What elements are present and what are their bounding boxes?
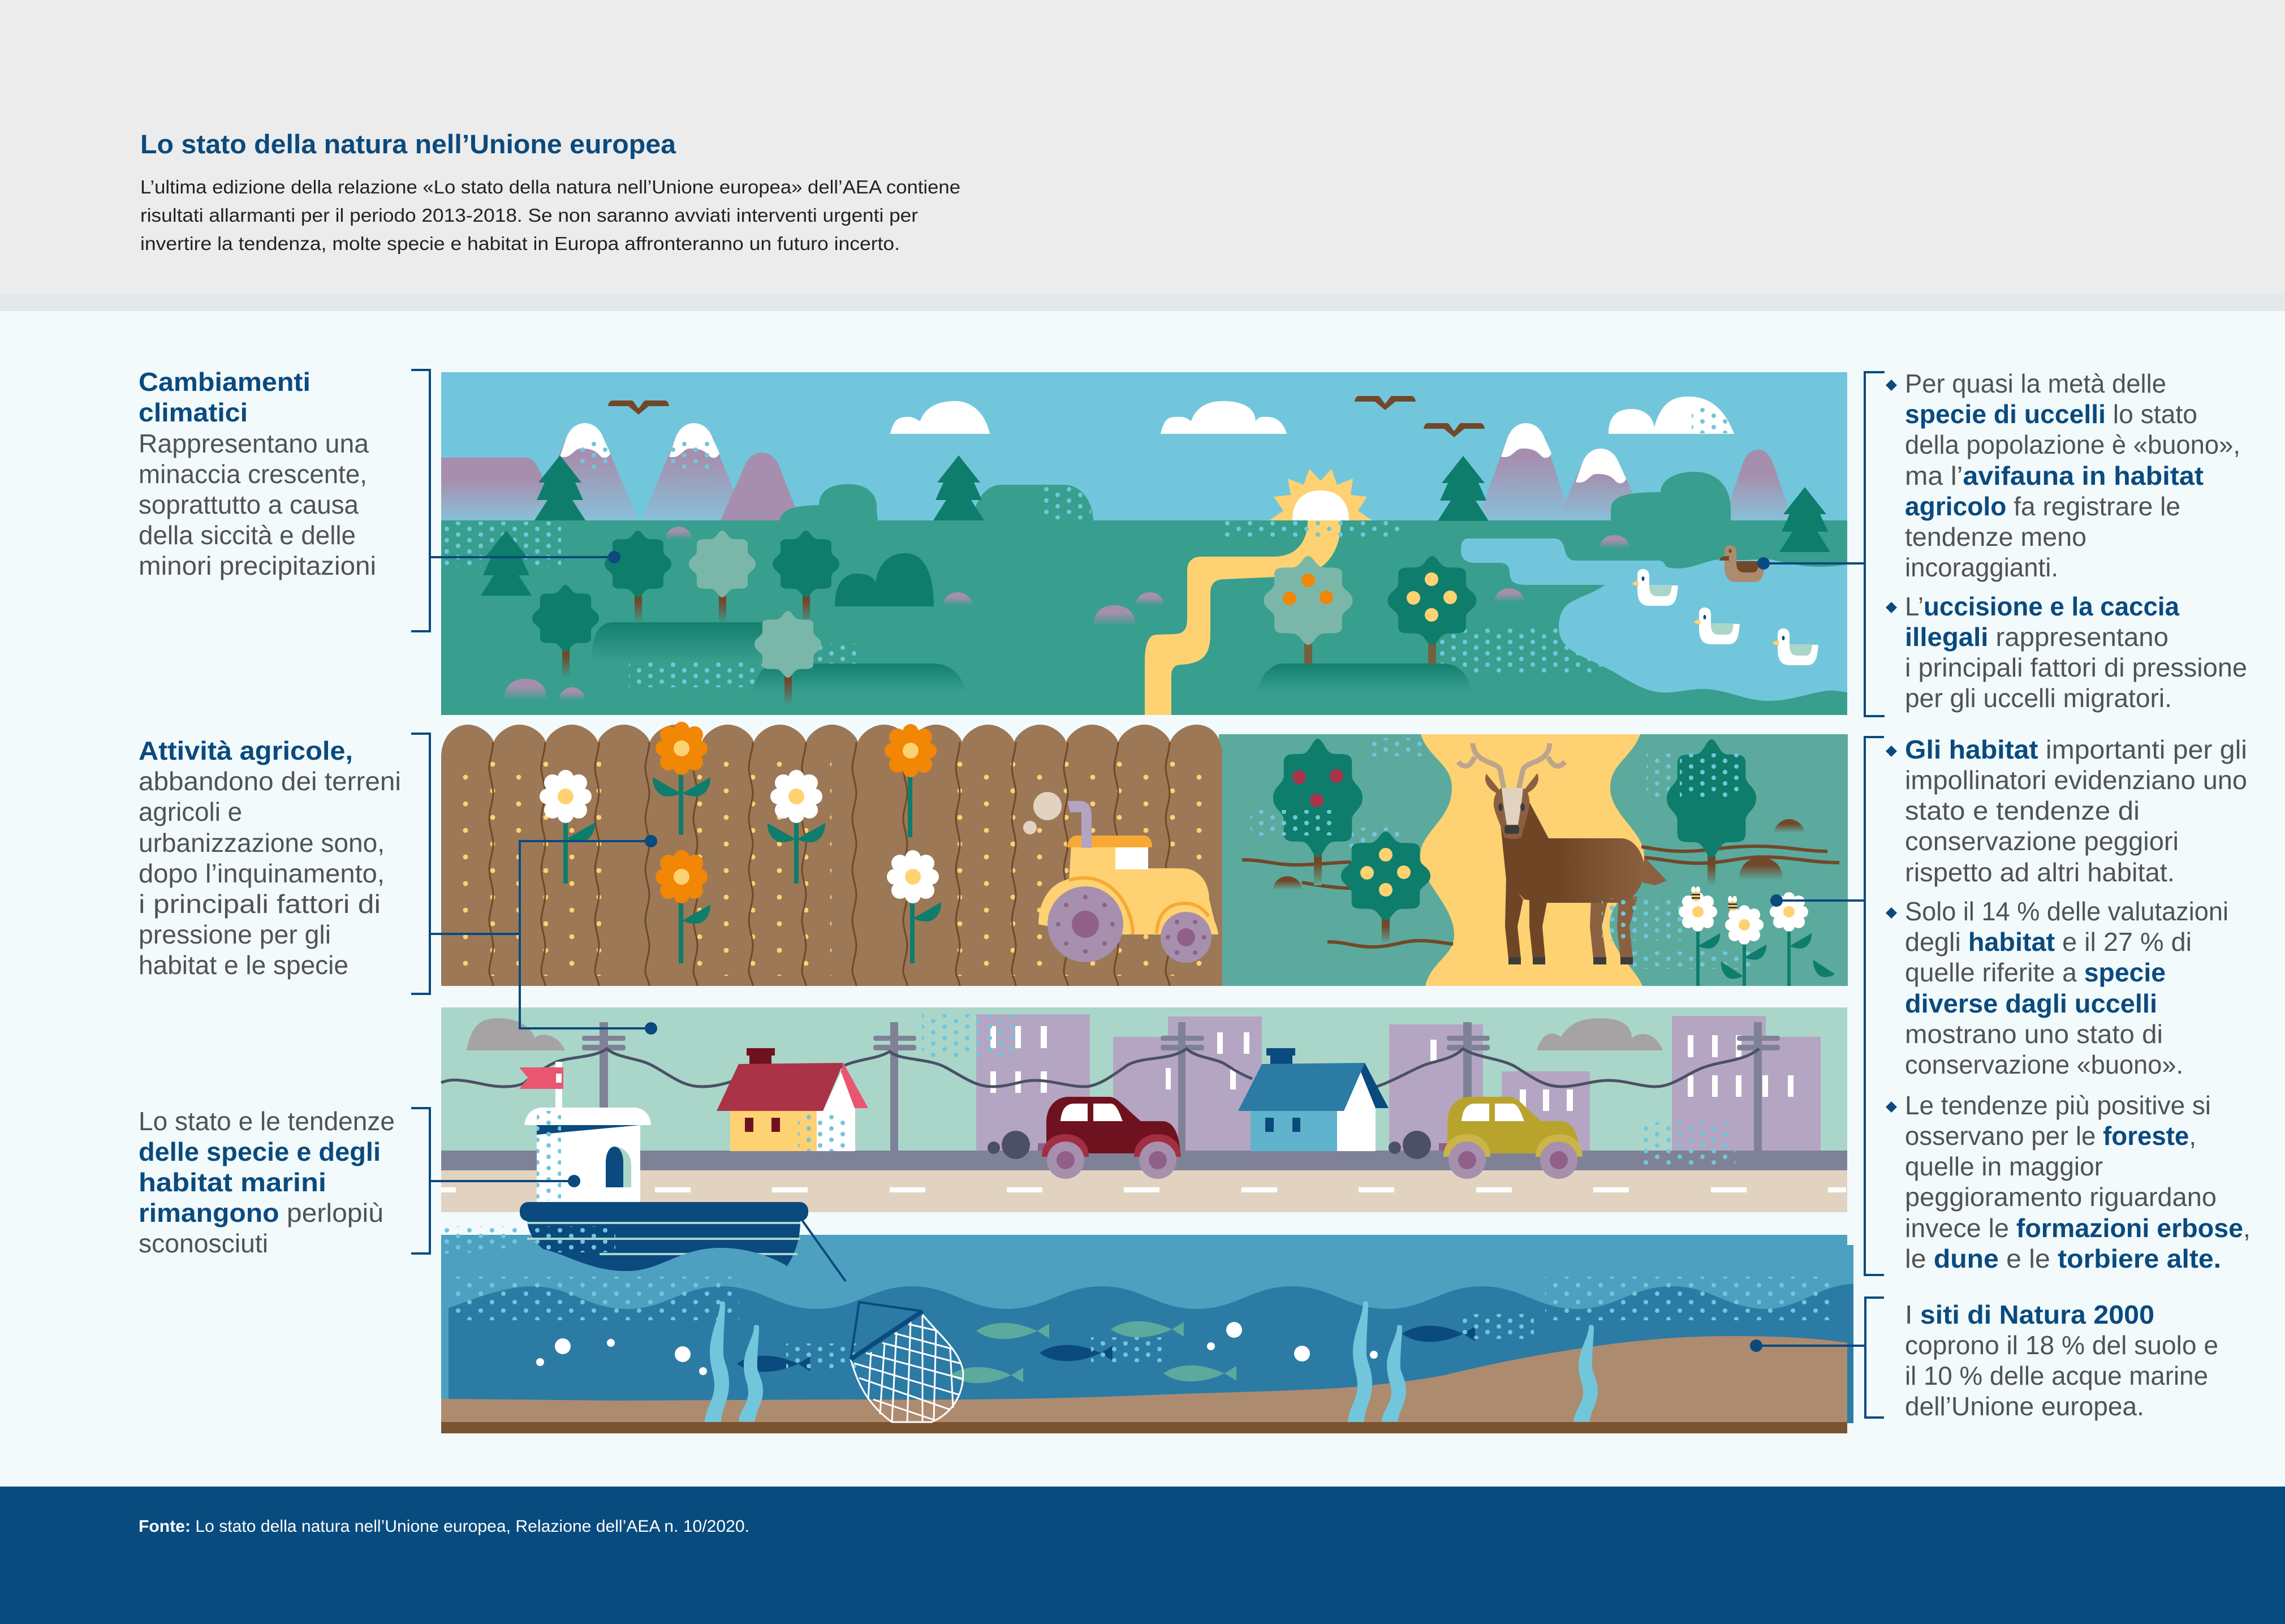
- text: birds: incoraggianti.: [1905, 553, 2058, 582]
- power lines: [441, 1049, 1759, 1087]
- icon: birds: [608, 396, 1485, 437]
- text: agricultural activities: pressione per gli: [139, 920, 331, 949]
- text: birds: Per quasi la metà delle: [1905, 369, 2166, 398]
- icon: fishing boat: [519, 1062, 846, 1281]
- text: habitats: invece le formazioni erbose,: [1905, 1213, 2250, 1243]
- icon: tractor: [1023, 792, 1218, 963]
- meadow flowers and bees: [1679, 886, 1835, 986]
- seaweed: [705, 1301, 1598, 1422]
- intro text: risultati allarmanti per il periodo 2013-2018. Se non saranno avviati interventi urgenti per: [140, 205, 918, 226]
- field dots: [461, 761, 1218, 976]
- text: agricultural activities: dopo l’inquinamento,: [139, 859, 385, 888]
- connectors: left brackets: [411, 370, 651, 1253]
- furrow lines: [489, 742, 1170, 986]
- text: climate change: soprattutto a causa: [139, 490, 359, 519]
- text: habitats: quelle riferite a specie: [1905, 958, 2166, 987]
- connector dots: [568, 551, 1783, 1352]
- icon: clouds: [890, 397, 1734, 434]
- icon: sun: [1269, 469, 1372, 520]
- text: habitats: impollinatori evidenziano uno: [1905, 765, 2247, 795]
- background: [441, 1007, 1847, 1151]
- wavy field lines on meadow: [1242, 846, 1839, 947]
- text: marine species: delle specie e degli: [139, 1137, 381, 1166]
- fruit trees: [1264, 556, 1476, 664]
- utility poles: [582, 1022, 1780, 1152]
- text: habitats: le dune e le torbiere alte.: [1905, 1244, 2221, 1273]
- footer band: [0, 1487, 2285, 1624]
- text: habitats: peggioramento riguardano: [1905, 1182, 2217, 1212]
- text: climate change: Cambiamenti: [139, 367, 311, 397]
- text: climate change: [139, 367, 376, 580]
- connectors: right brackets: [1756, 372, 1885, 1418]
- text: marine species: sconosciuti: [139, 1229, 268, 1258]
- text: Natura 2000: il 10 % delle acque marine: [1905, 1361, 2208, 1390]
- text: habitats: osservano per le foreste,: [1905, 1121, 2196, 1151]
- field flowers: [540, 722, 941, 963]
- text: agricultural activities: Attività agricole,: [139, 736, 353, 765]
- text: habitats: Le tendenze più positive si: [1905, 1091, 2211, 1120]
- title: Lo stato della natura nell’Unione europea: [140, 129, 676, 159]
- text: birds: tendenze meno: [1905, 522, 2086, 552]
- hull: [527, 1221, 800, 1278]
- text: Natura 2000: [1905, 1300, 2218, 1421]
- icon: blue house: [1238, 1048, 1389, 1151]
- yellow clearing: [1420, 734, 1644, 986]
- text: birds: per gli uccelli migratori.: [1905, 683, 2172, 713]
- road dashes: [441, 1187, 1846, 1192]
- front wave: [441, 1247, 792, 1318]
- domes: [1273, 819, 1804, 890]
- rocks: [504, 527, 1629, 700]
- text: agricultural activities: agricoli e: [139, 797, 242, 826]
- text: birds: illegali rappresentano: [1905, 622, 2168, 652]
- fish: [737, 1314, 1534, 1383]
- text: birds: della popolazione è «buono»,: [1905, 430, 2240, 459]
- icon: swans: [1632, 569, 1818, 665]
- cabin: [537, 1123, 640, 1203]
- text: marine species: habitat marini: [139, 1168, 326, 1197]
- text: birds: [1905, 369, 2247, 713]
- text: climate change: minaccia crescente,: [139, 459, 367, 489]
- meadow trees: [1251, 739, 1756, 944]
- text: birds: ma l’avifauna in habitat: [1905, 461, 2204, 490]
- icon: red car: [988, 1097, 1181, 1179]
- text: birds: L’uccisione e la caccia: [1905, 592, 2179, 621]
- text: birds: agricolo fa registrare le: [1905, 492, 2180, 521]
- flag: [555, 1062, 562, 1110]
- intro text: L’ultima edizione della relazione «Lo stato della natura nell’Unione europea» dell’AEA contiene: [140, 176, 960, 197]
- icon: grey clouds: [467, 1018, 1663, 1050]
- water dots: [452, 1277, 739, 1320]
- bullets: [1886, 380, 1897, 1113]
- road: [441, 1151, 1847, 1170]
- gradient hills: [592, 622, 1470, 692]
- panel: agricultural field and deer: [441, 722, 1848, 986]
- deep water: [449, 1284, 1853, 1423]
- panel: sea: [441, 1226, 1853, 1423]
- lake: [1461, 539, 1847, 701]
- sand: [441, 1336, 1847, 1422]
- text: habitats: [1905, 735, 2250, 1273]
- dots on meadow: [1347, 738, 1755, 969]
- text: Natura 2000: I siti di Natura 2000: [1905, 1300, 2154, 1329]
- dot textures: [441, 520, 1602, 687]
- text: marine species: Lo stato e le tendenze: [139, 1106, 395, 1136]
- sea layers: [441, 1247, 1853, 1433]
- buildings: [976, 1014, 1821, 1151]
- icon: brown duck: [1719, 545, 1765, 582]
- text: habitats: quelle in maggior: [1905, 1152, 2103, 1181]
- ground: [441, 520, 1847, 715]
- text: habitats: rispetto ad altri habitat.: [1905, 858, 2175, 887]
- bushes on horizon: [779, 472, 1731, 522]
- text: Natura 2000: dell’Unione europea.: [1905, 1392, 2144, 1421]
- text: birds: specie di uccelli lo stato: [1905, 399, 2197, 429]
- seabed strip: [441, 1422, 1847, 1433]
- text: habitats: diverse dagli uccelli: [1905, 989, 2157, 1018]
- intro text: [140, 176, 960, 254]
- trunks: [635, 594, 810, 623]
- text: habitats: stato e tendenze di: [1905, 796, 2140, 825]
- round trees: [532, 531, 839, 705]
- icon: deer: [1458, 743, 1667, 964]
- panel: mountains and lake landscape: [441, 372, 1847, 715]
- text: agricultural activities: habitat e le specie: [139, 950, 348, 980]
- panel: town and road: [441, 1007, 1847, 1212]
- bubbles: [536, 1322, 1378, 1375]
- text: habitats: Solo il 14 % delle valutazioni: [1905, 897, 2228, 926]
- text: agricultural activities: urbanizzazione sono,: [139, 828, 385, 858]
- text: habitats: degli habitat e il 27 % di: [1905, 927, 2192, 957]
- text: Natura 2000: coprono il 18 % del suolo e: [1905, 1330, 2218, 1360]
- icon: red house: [717, 1048, 868, 1151]
- pine trees: [481, 455, 1830, 596]
- green meadow: [1219, 734, 1848, 986]
- text: marine species: rimangono perlopiù: [139, 1198, 383, 1227]
- text: climate change: Rappresentano una: [139, 429, 369, 458]
- text: habitats: conservazione peggiori: [1905, 826, 2179, 856]
- text: agricultural activities: [139, 736, 401, 980]
- icon: mountains: [441, 423, 1793, 520]
- dots over deer legs: [1602, 898, 1683, 941]
- sky: [441, 372, 1847, 520]
- text: birds: i principali fattori di pressione: [1905, 653, 2247, 682]
- brown field: [441, 725, 1222, 986]
- header band: [0, 0, 2285, 311]
- text: agricultural activities: i principali fattori di: [139, 889, 381, 919]
- intro text: invertire la tendenza, molte specie e habitat in Europa affronteranno un futuro incerto.: [140, 233, 900, 254]
- surface water: [441, 1235, 1847, 1422]
- text: habitats: conservazione «buono».: [1905, 1050, 2183, 1079]
- source note: Fonte: Lo stato della natura nell’Unione europea, Relazione dell’AEA n. 10/2020.: [139, 1517, 749, 1536]
- text: climate change: climatici: [139, 398, 248, 427]
- dark hills: [835, 553, 934, 606]
- building windows: [990, 1026, 1793, 1111]
- yellow path: [1145, 520, 1341, 715]
- text: marine species: [139, 1106, 395, 1258]
- text: agricultural activities: abbandono dei terreni: [139, 766, 401, 796]
- icon: fishing net: [851, 1302, 963, 1422]
- text: habitats: mostrano uno stato di: [1905, 1019, 2163, 1049]
- text: habitats: Gli habitat importanti per gli: [1905, 735, 2247, 764]
- text: climate change: della siccità e delle: [139, 520, 356, 550]
- text: climate change: minori precipitazioni: [139, 551, 376, 580]
- icon: yellow car: [1389, 1097, 1583, 1179]
